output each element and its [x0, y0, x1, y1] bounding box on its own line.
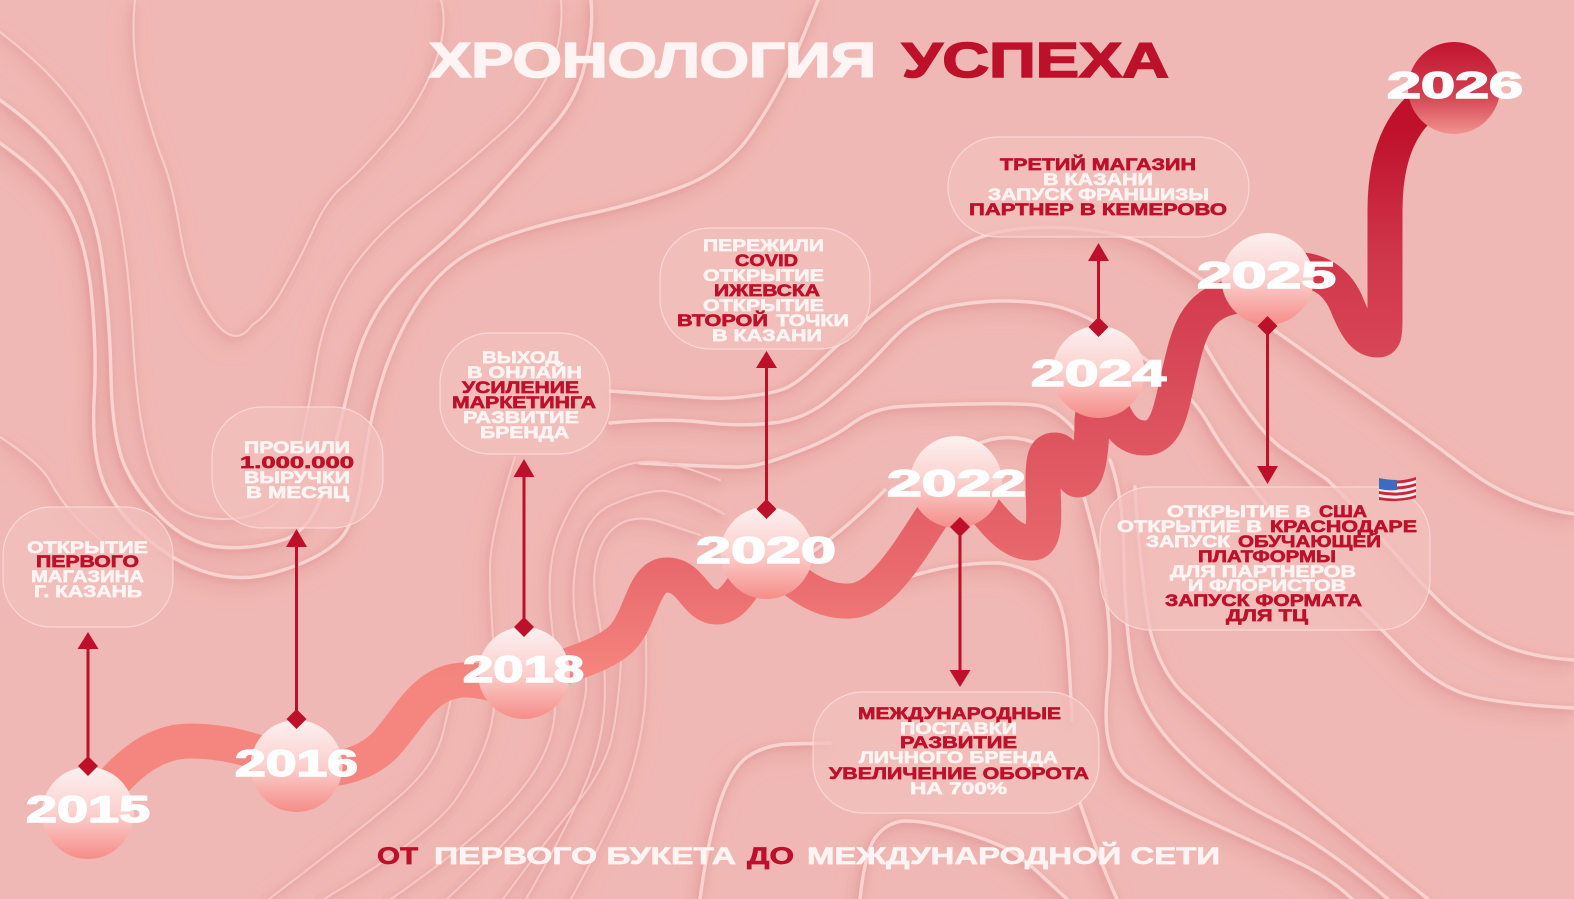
card text: ПОСТАВКИ [900, 719, 1017, 738]
card text: ЗАПУСК ФОРМАТА [1165, 591, 1362, 610]
card text [829, 704, 1089, 798]
card text: 1.000.000 [240, 453, 354, 472]
card text: Г. КАЗАНЬ [34, 582, 142, 601]
card text: ОТКРЫТИЕ В [1117, 517, 1262, 536]
node circle [720, 507, 812, 599]
node circle [1222, 233, 1314, 325]
card text: США [1319, 502, 1367, 521]
card text [677, 236, 849, 345]
card text [27, 538, 148, 601]
title: УСПЕХА [902, 34, 1169, 88]
arrow up [78, 632, 98, 776]
card text [969, 155, 1227, 219]
card text: ДЛЯ ПАРТНЕРОВ [1170, 562, 1356, 581]
arrow up [756, 351, 777, 519]
subtitle: ПЕРВОГО БУКЕТА [434, 843, 736, 870]
card background [1100, 487, 1430, 630]
card text: МАГАЗИНА [31, 567, 144, 586]
title: ХРОНОЛОГИЯ [429, 34, 876, 88]
card text: В ОНЛАЙН [467, 363, 582, 382]
card text: ОТКРЫТИЕ В [1167, 502, 1311, 521]
card text: ОТКРЫТИЕ [703, 296, 824, 315]
subtitle [377, 842, 1220, 870]
year: 2026 [1387, 65, 1523, 106]
node circle [478, 627, 570, 719]
card text: ОТКРЫТИЕ [703, 266, 824, 285]
year: 2016 [235, 743, 358, 784]
node circle [910, 436, 1002, 528]
card text: ВЫРУЧКИ [244, 468, 350, 487]
card text: ВЫХОД [482, 348, 560, 367]
card text: ОТКРЫТИЕ [27, 538, 148, 557]
year: 2020 [696, 530, 836, 571]
panel: 2015 card [3, 507, 173, 627]
timeline ribbon [88, 88, 1454, 813]
card text: КРАСНОДАРЕ [1270, 517, 1417, 536]
card text: ЗАПУСК [1146, 532, 1231, 551]
milestone 2020 [696, 351, 836, 599]
arrow up [1088, 243, 1109, 337]
panel: 2025 card [1100, 487, 1430, 630]
arrow down [1257, 316, 1278, 484]
milestone 2024 [1031, 243, 1167, 418]
milestone 2018 [463, 459, 584, 719]
card text: НА 700% [910, 779, 1007, 798]
node circle [250, 720, 342, 812]
milestone 2022 [887, 436, 1026, 687]
card text: БРЕНДА [480, 423, 569, 442]
card background [3, 507, 173, 627]
card text: ПАРТНЕР В КЕМЕРОВО [969, 200, 1227, 219]
year: 2015 [26, 789, 150, 830]
card text: ПЛАТФОРМЫ [1198, 547, 1336, 566]
card text: ПЕРЕЖИЛИ [703, 236, 824, 255]
card text [452, 348, 596, 442]
arrow up [286, 529, 307, 729]
card text: ЗАПУСК ФРАНШИЗЫ [988, 185, 1209, 204]
card text: МАРКЕТИНГА [452, 393, 596, 412]
arrow down [950, 517, 970, 687]
panel: 2016 card [212, 407, 383, 528]
card text: COVID [735, 251, 798, 270]
year: 2022 [887, 463, 1026, 504]
card background [440, 333, 610, 454]
year: 2024 [1031, 353, 1167, 394]
milestone 2026 [1387, 42, 1523, 134]
card text: ТРЕТИЙ МАГАЗИН [1000, 155, 1196, 174]
card text: В КАЗАНИ [712, 326, 822, 345]
card text: ПРОБИЛИ [244, 438, 350, 457]
card text: И ФЛОРИСТОВ [1188, 576, 1346, 595]
card background [660, 228, 870, 349]
card text: ИЖЕВСКА [714, 281, 820, 300]
card text: ЛИЧНОГО БРЕНДА [859, 748, 1058, 767]
panel: 2020 card [660, 228, 870, 349]
year: 2018 [463, 649, 584, 690]
title [429, 34, 1169, 88]
card text: УСИЛЕНИЕ [462, 378, 579, 397]
icon: US flag [1379, 477, 1416, 501]
node circle [1408, 42, 1500, 134]
card text: МЕЖДУНАРОДНЫЕ [858, 704, 1061, 723]
milestone 2016 [235, 529, 358, 812]
card background [212, 407, 383, 528]
subtitle: МЕЖДУНАРОДНОЙ СЕТИ [807, 842, 1220, 870]
card text [240, 438, 354, 502]
panel: 2022 card [813, 692, 1099, 813]
subtitle: ОТ [377, 843, 418, 870]
card text: РАЗВИТИЕ [463, 408, 579, 427]
card text: РАЗВИТИЕ [900, 733, 1017, 752]
card text: ТОЧКИ [776, 311, 849, 330]
card text: ДЛЯ ТЦ [1226, 606, 1309, 625]
card text: УВЕЛИЧЕНИЕ ОБОРОТА [829, 764, 1089, 783]
card text: В МЕСЯЦ [246, 483, 350, 502]
milestone 2015 [26, 632, 150, 859]
card text: В КАЗАНИ [1043, 170, 1153, 189]
node circle [1052, 326, 1144, 418]
node circle [42, 767, 134, 859]
arrow up [514, 459, 534, 637]
milestone 2025 [1197, 233, 1336, 484]
card text: ВТОРОЙ [677, 311, 768, 330]
subtitle: ДО [747, 843, 794, 870]
card background [948, 137, 1249, 237]
card text: ОБУЧАЮЩЕЙ [1238, 532, 1381, 551]
year: 2025 [1197, 255, 1336, 296]
card background [813, 692, 1099, 813]
panel: 2018 card [440, 333, 610, 454]
card text: ПЕРВОГО [36, 552, 139, 571]
card text [1117, 502, 1417, 625]
panel: 2024 card [948, 137, 1249, 237]
